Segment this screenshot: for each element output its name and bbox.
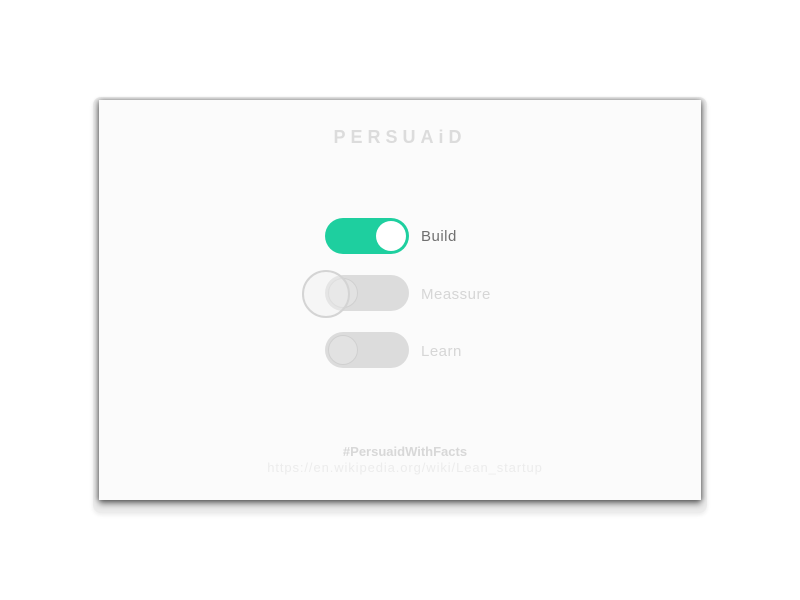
label: Build: Build <box>421 228 457 245</box>
source url: https://en.wikipedia.org/wiki/Lean_startup <box>267 460 543 475</box>
touch ripple circle <box>302 270 350 318</box>
toggle: Build (on) <box>325 218 409 254</box>
label: Meassure: Meassure <box>421 286 491 303</box>
knob <box>328 335 358 365</box>
toggle: Meassure (off) <box>325 275 409 311</box>
knob <box>376 221 406 251</box>
label: Learn: Learn <box>421 343 462 360</box>
card shadow frame <box>93 97 707 513</box>
hashtag: #PersuaidWithFacts <box>343 444 467 459</box>
title: PERSUAiD logo: PERSUAiD <box>333 127 466 147</box>
toggle: Learn (off) <box>325 332 409 368</box>
card <box>99 100 701 500</box>
knob <box>328 278 358 308</box>
